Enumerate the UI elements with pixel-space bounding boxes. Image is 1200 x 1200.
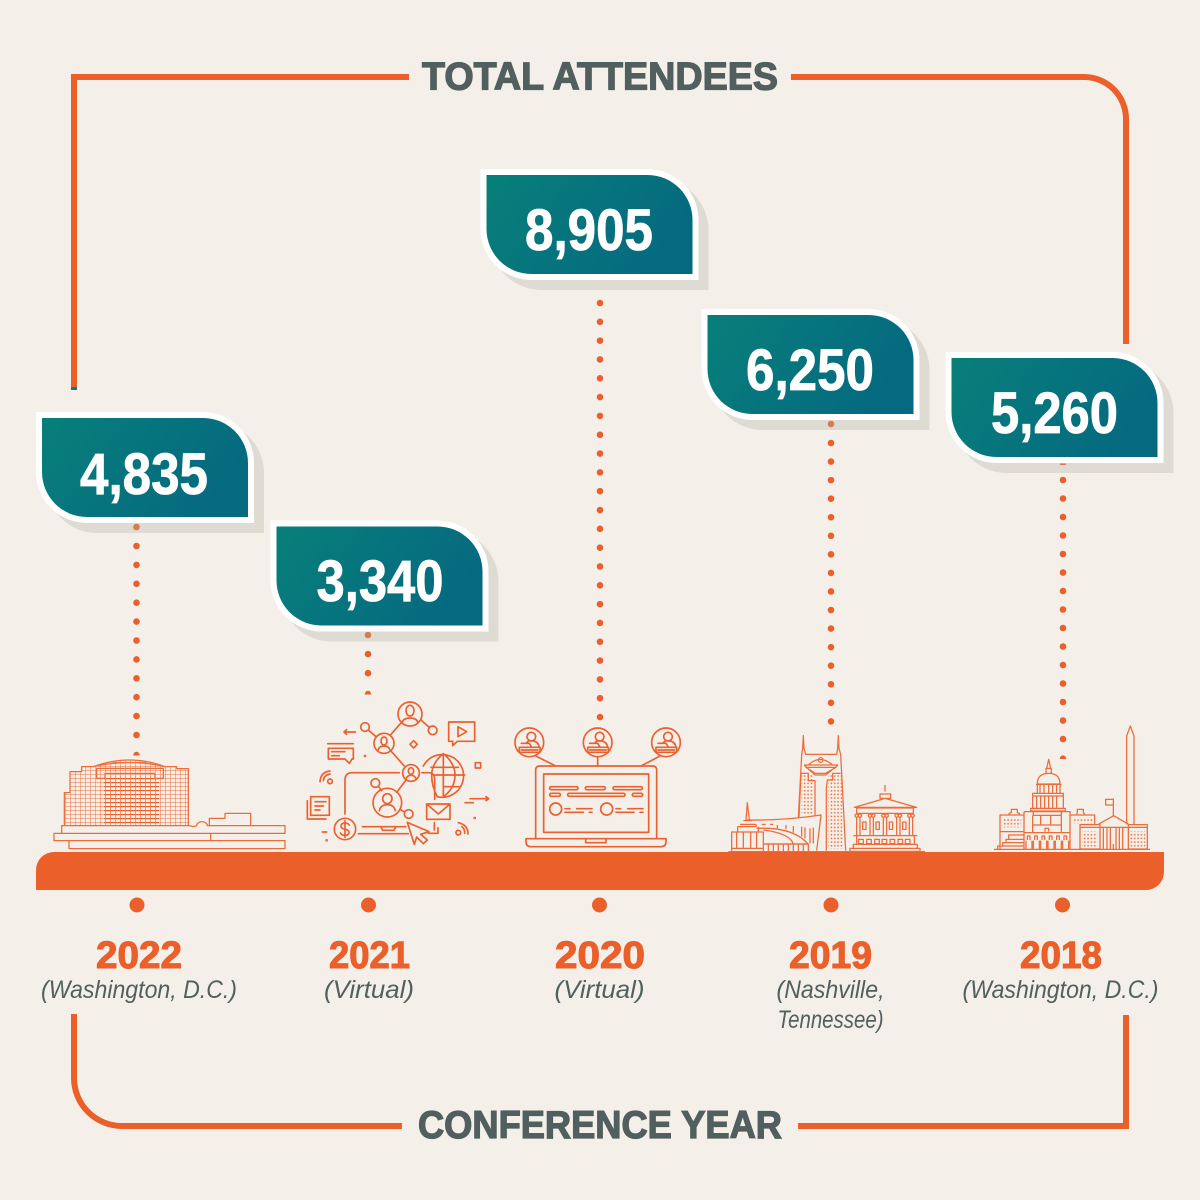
label: 2022: 2022 — [96, 935, 182, 977]
dotted connector ends — [133, 691, 1066, 759]
label: 2019: 2019 — [789, 935, 872, 977]
badge: 2020 attendees — [486, 175, 702, 284]
badge: 2018 attendees: 5,260 — [991, 381, 1118, 446]
heading: conference year: CONFERENCE YEAR — [418, 1104, 782, 1147]
label: 2019: Tennessee) — [778, 1006, 884, 1034]
dotted connector 2020 — [597, 303, 603, 718]
label: 2020: (Virtual) — [554, 976, 644, 1004]
icon: Washington D.C. skyline — [994, 726, 1150, 849]
label: 2021: (Virtual) — [324, 976, 414, 1004]
dotted connector 2021 — [365, 654, 371, 675]
frame: bottom bracket — [74, 1014, 1126, 1126]
timeline bar — [36, 852, 1164, 890]
badge: 2022 attendees — [42, 418, 258, 527]
label: 2018 — [962, 935, 1158, 1004]
timeline dots — [130, 898, 1070, 912]
connector dots over badge shadows — [133, 421, 1066, 638]
badge: 2019 attendees — [708, 315, 924, 424]
label: 2022: (Washington, D.C.) — [41, 976, 237, 1004]
label: 2020: 2020 — [555, 935, 645, 977]
icon: convention center building — [54, 760, 285, 849]
label: 2022 — [41, 935, 237, 1004]
label: 2021 — [324, 935, 414, 1004]
badge: 2019 attendees: 6,250 — [746, 338, 874, 403]
badge: 2021 attendees — [276, 526, 492, 636]
label: 2018: 2018 — [1020, 935, 1102, 977]
label: 2019: (Nashville, — [776, 976, 884, 1004]
label: 2018: (Washington, D.C.) — [962, 976, 1158, 1004]
label: 2019 — [776, 935, 884, 1034]
heading: total attendees: TOTAL ATTENDEES — [422, 56, 778, 98]
dotted connector 2018 — [1060, 480, 1066, 740]
dotted connector 2019 — [828, 443, 834, 722]
label: 2020 — [554, 935, 645, 1004]
label: 2021: 2021 — [329, 935, 410, 977]
badge: 2020 attendees: 8,905 — [525, 198, 653, 263]
frame: top bracket — [71, 77, 1126, 390]
icon: Nashville skyline — [728, 736, 925, 852]
badge: 2018 attendees — [952, 358, 1168, 467]
badge: 2021 attendees: 3,340 — [316, 549, 444, 614]
dotted connector 2022 — [133, 546, 140, 750]
icon: virtual network — [307, 702, 489, 844]
icon: laptop with remote attendees — [515, 728, 680, 847]
badge: 2022 attendees: 4,835 — [80, 442, 208, 507]
